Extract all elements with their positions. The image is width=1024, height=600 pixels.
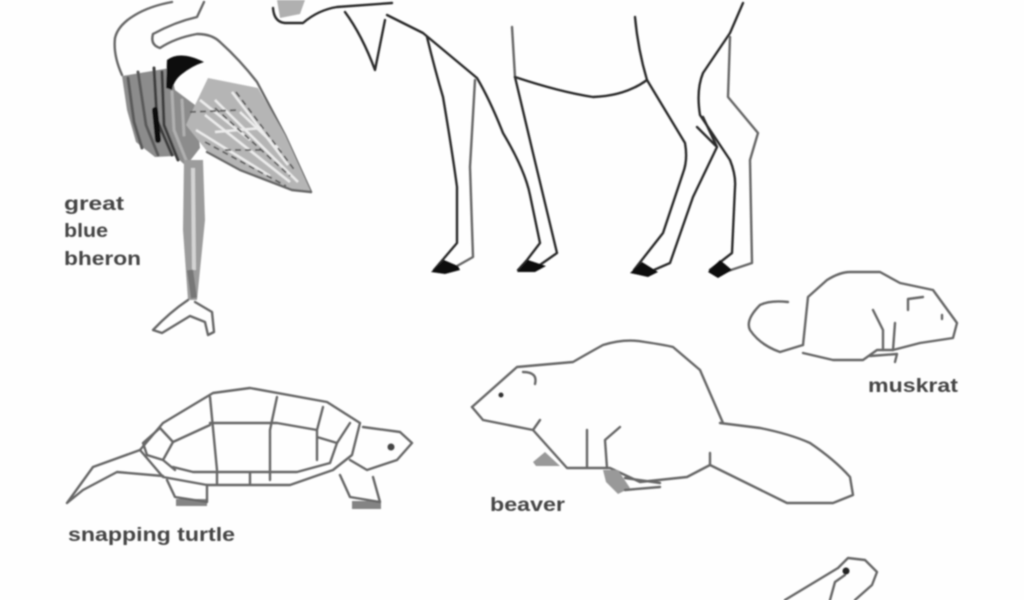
- moose hind legs: [634, 80, 686, 270]
- moose belly: [515, 17, 647, 97]
- turtle rear foot: [167, 480, 207, 502]
- heron wing: [186, 78, 311, 192]
- label: muskrat: muskrat: [868, 376, 959, 397]
- turtle tail: [67, 450, 163, 503]
- moose muzzle: [277, 0, 305, 18]
- beaver arm: [587, 427, 620, 468]
- snapping turtle: [67, 388, 412, 509]
- muskrat body outline: [803, 272, 957, 360]
- beaver eye: [498, 392, 504, 398]
- moose: [273, 0, 758, 278]
- beaver tail: [710, 423, 853, 503]
- turtle shell outline: [140, 388, 360, 485]
- heron: [115, 2, 311, 335]
- moose chest and front legs: [387, 15, 540, 270]
- label: great blue heron: great: [64, 194, 125, 215]
- beaver body outline: [472, 341, 723, 423]
- beaver ear: [523, 372, 536, 384]
- heron leg: [183, 160, 205, 300]
- turtle eye: [388, 444, 394, 450]
- muskrat arm and foot: [870, 310, 897, 362]
- heron breast plumes: [122, 68, 200, 166]
- heron foot: [153, 300, 214, 335]
- heron neck and head: [115, 2, 311, 192]
- label: snapping turtle: snapping turtle: [68, 525, 235, 546]
- label: beaver: beaver: [490, 495, 566, 516]
- turtle head: [350, 427, 412, 470]
- muskrat: [749, 272, 957, 362]
- heron black shoulder patch: [166, 55, 204, 90]
- moose dewlap: [345, 12, 385, 70]
- beaver feet: [533, 452, 630, 494]
- frog eye: [842, 568, 850, 574]
- label: great blue heron: blue: [64, 221, 108, 242]
- muskrat ear and eye: [908, 297, 942, 319]
- muskrat tail: [749, 301, 803, 352]
- turtle front foot: [340, 475, 380, 502]
- turtle shell scutes: [143, 397, 350, 484]
- label: great blue heron: bheron: [64, 249, 141, 270]
- beaver: [472, 341, 853, 503]
- frog: [785, 558, 877, 600]
- label: great blue heron: [64, 194, 141, 270]
- moose hooves: [431, 260, 732, 278]
